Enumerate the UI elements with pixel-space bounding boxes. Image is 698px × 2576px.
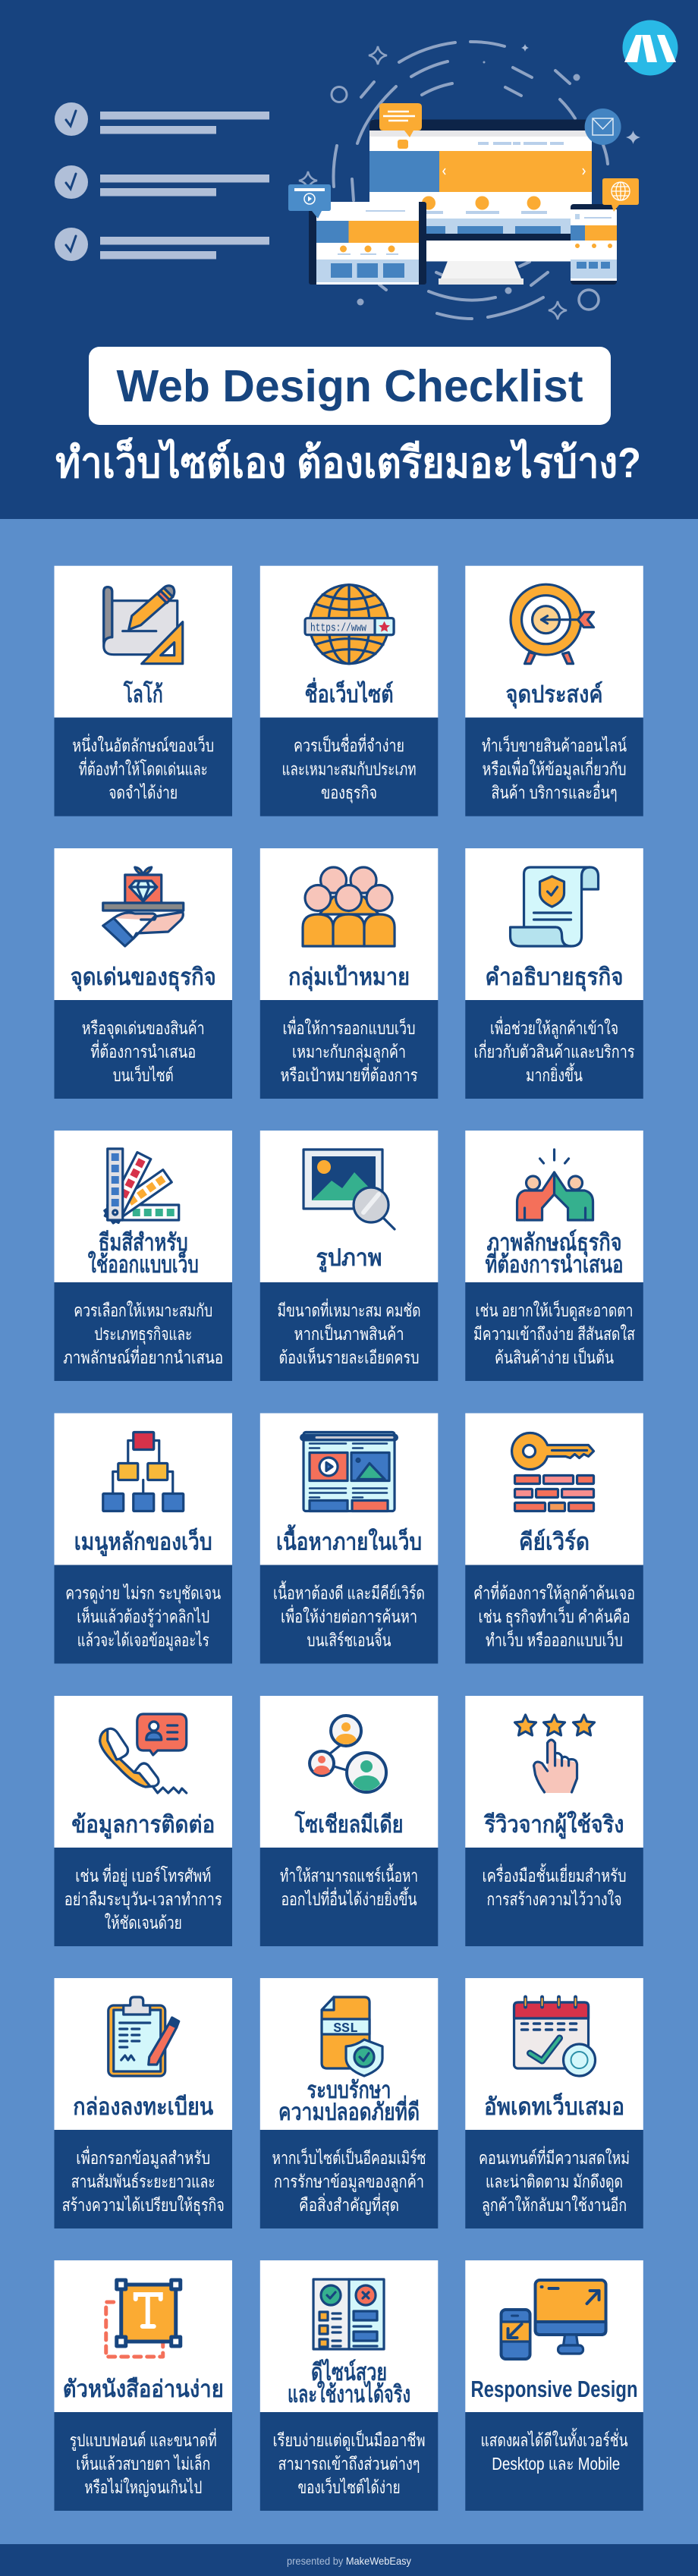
heading: ความปลอดภัยที่ดี [278, 2095, 420, 2125]
heading: และใช้งานได้จริง [288, 2380, 410, 2408]
description: ทำให้สามารถแชร์เนื้อหา [280, 1864, 418, 1886]
icon: picture and magnifier [303, 1150, 395, 1229]
description: หรือไม่ใหญ่จนเกินไป [84, 2477, 202, 2497]
icon: scroll with shield [511, 867, 599, 946]
heading: รูปภาพ [316, 1244, 382, 1272]
description: ลูกค้าให้กลับมาใช้งานอีก [482, 2195, 627, 2216]
description: ของธุรกิจ [321, 783, 377, 804]
description [272, 2147, 426, 2216]
description: เพื่อกรอกข้อมูลสำหรับ [76, 2146, 210, 2169]
description: เหมาะกับกลุ่มลูกค้า [292, 1042, 406, 1062]
heading: อัพเดทเว็บเสมอ [484, 2092, 624, 2120]
icon: key and bricks [512, 1433, 594, 1511]
description: และน่าติดตาม มักดึงดูด [486, 2172, 623, 2192]
description [62, 2146, 225, 2216]
heading: รีวิวจากผู้ใช้จริง [483, 1810, 624, 1839]
icon: ssl document and shield: SSL [333, 2021, 358, 2037]
card: reviews [465, 1696, 643, 1946]
icon: high five [517, 1150, 593, 1220]
description: หนึ่งในอัตลักษณ์ของเว็บ [72, 734, 214, 756]
description: การสร้างความไว้วางใจ [487, 1889, 622, 1909]
icon: monitor and phone [501, 2280, 606, 2359]
card: main menu [55, 1413, 232, 1663]
description: หรือจุดเด่นของสินค้า [82, 1018, 205, 1039]
description: เพื่อให้การออกแบบเว็บ [283, 1016, 416, 1038]
heading: Responsive Design [471, 2376, 638, 2402]
description: เพื่อให้ง่ายต่อการค้นหา [281, 1604, 417, 1627]
description [281, 1016, 418, 1085]
description: และเหมาะสมกับประเภท [282, 760, 417, 779]
footer: presented by MakeWebEasy [287, 2555, 411, 2567]
devices illustration [288, 42, 640, 319]
description [479, 2146, 630, 2216]
description: การรักษาข้อมูลของลูกค้า [274, 2172, 424, 2192]
heading: เนื้อหาภายในเว็บ [276, 1524, 422, 1555]
description: มีความเข้าถึงง่าย สีสันสดใส [473, 1324, 635, 1344]
heading [278, 2077, 420, 2125]
description: คือสิ่งสำคัญที่สุด [299, 2193, 399, 2216]
card: keywords [465, 1413, 643, 1663]
heading: คำอธิบายธุรกิจ [486, 964, 624, 992]
description: ควรดูง่าย ไม่รก ระบุชัดเจน [65, 1583, 221, 1604]
card: update site [465, 1978, 643, 2228]
description: หรือเพื่อให้ข้อมูลเกี่ยวกับ [483, 757, 627, 780]
icon: group of people [303, 867, 395, 946]
description: บนเสิร์ชเอนจิ้น [307, 1628, 391, 1650]
description: เครื่องมือชั้นเยี่ยมสำหรับ [483, 1864, 627, 1886]
heading: ดีไซน์สวย [311, 2358, 387, 2386]
icon: globe url [305, 585, 394, 664]
card: purpose [465, 566, 643, 816]
description: รูปแบบฟอนต์ และขนาดที่ [70, 2428, 217, 2451]
title box [89, 347, 611, 425]
description: สานสัมพันธ์ระยะยาวและ [71, 2172, 215, 2191]
description: ค้นสินค้าง่าย เป็นต้น [495, 1346, 614, 1367]
heading: จุดเด่นของธุรกิจ [71, 964, 216, 992]
icon: sitemap [103, 1433, 184, 1511]
heading: ระบบรักษา [307, 2077, 391, 2103]
icon: social network [310, 1716, 386, 1792]
card: security [260, 1978, 438, 2228]
heading: จุดประสงค์ [506, 681, 603, 709]
description: เช่น ธุรกิจทำเว็บ คำค้นคือ [479, 1606, 630, 1627]
body background [0, 519, 698, 2544]
description: ประเภทธุรกิจและ [94, 1324, 192, 1345]
icon: do and don't layouts [313, 2279, 384, 2349]
heading: เมนูหลักของเว็บ [74, 1527, 212, 1557]
description [72, 734, 214, 803]
description: แสดงผลได้ดีในทั้งเวอร์ชั่น [481, 2428, 628, 2450]
description: คอนเทนต์ที่มีความสดใหม่ [479, 2146, 630, 2168]
brand logo [622, 20, 678, 76]
description: เพื่อช่วยให้ลูกค้าเข้าใจ [490, 1016, 618, 1039]
heading [288, 2358, 410, 2408]
description: สร้างความได้เปรียบให้ธุรกิจ [62, 2195, 225, 2216]
description: หรือเป้าหมายที่ต้องการ [281, 1063, 418, 1085]
card: logo [55, 566, 232, 816]
heading: ที่ต้องการนำเสนอ [486, 1247, 624, 1278]
checklist illustration [55, 102, 269, 261]
description: ของเว็บไซต์ได้ง่าย [298, 2476, 401, 2497]
icon: ssl document and shield [322, 1997, 382, 2076]
subtitle: ทำเว็บไซต์เอง ต้องเตรียมอะไรบ้าง? [55, 436, 641, 486]
description: มากยิ่งขึ้น [526, 1063, 583, 1085]
description: เห็นแล้วสบายตา ไม่เล็ก [76, 2452, 210, 2474]
description [64, 1864, 222, 1933]
description: ทำเว็บ หรือออกแบบเว็บ [486, 1628, 623, 1650]
description: คำที่ต้องการให้ลูกค้าค้นเจอ [473, 1581, 635, 1604]
heading: โซเชียลมีเดีย [294, 1810, 404, 1838]
heading: ธีมสีสำหรับ [99, 1229, 188, 1256]
icon: web page [303, 1433, 395, 1511]
icon: globe url: https://www [310, 622, 366, 635]
icon: text box [106, 2280, 181, 2357]
description [473, 1299, 635, 1367]
heading: คีย์เวิร์ด [519, 1528, 590, 1555]
description [65, 1583, 221, 1651]
description: ออกไปที่อื่นได้ง่ายยิ่งขึ้น [281, 1887, 417, 1909]
card: color theme [55, 1131, 232, 1381]
heading: ใช้ออกแบบเว็บ [88, 1250, 199, 1278]
card: social media [260, 1696, 438, 1946]
description [82, 1018, 205, 1085]
description [483, 1864, 627, 1909]
description: สามารถเข้าถึงส่วนต่างๆ [278, 2454, 420, 2474]
icon: gem on hand [103, 867, 184, 946]
description [273, 2429, 426, 2497]
description: ให้ชัดเจนด้วย [105, 1913, 182, 1933]
description: สินค้า บริการและอื่นๆ [492, 781, 618, 803]
card: usable design [260, 2260, 438, 2511]
heading: โลโก้ [123, 681, 163, 708]
description [70, 2428, 217, 2497]
heading [88, 1229, 199, 1278]
header background [0, 0, 698, 519]
card: business highlight [55, 848, 232, 1099]
icon: clipboard [108, 1997, 179, 2076]
heading: ภาพลักษณ์ธุรกิจ [487, 1229, 622, 1257]
description: อย่าลืมระบุวัน-เวลาทำการ [64, 1889, 222, 1910]
description: ที่ต้องทำให้โดดเด่นและ [79, 757, 208, 779]
title box: Web Design Checklist [117, 361, 583, 411]
description [474, 1016, 635, 1085]
heading: ตัวหนังสืออ่านง่าย [63, 2376, 224, 2402]
description: Desktop และ Mobile [492, 2454, 620, 2474]
card: contact [55, 1696, 232, 1946]
description: เนื้อหาต้องดี และมีคีย์เวิร์ด [273, 1581, 425, 1603]
description: ควรเป็นชื่อที่จำง่าย [294, 734, 404, 756]
description [63, 1301, 223, 1367]
icon: stars and pointing hand [515, 1715, 595, 1793]
description [481, 2428, 628, 2474]
card: brand image [465, 1131, 643, 1381]
description [473, 1581, 635, 1650]
heading: ข้อมูลการติดต่อ [71, 1811, 215, 1839]
description: ต้องเห็นรายละเอียดครบ [279, 1346, 420, 1367]
footer [0, 2544, 698, 2576]
description: จดจำได้ง่าย [108, 783, 178, 803]
description: เรียบง่ายแต่ดูเป็นมืออาชีพ [273, 2429, 426, 2451]
card: responsive design [465, 2260, 643, 2511]
description: มีขนาดที่เหมาะสม คมชัด [278, 1298, 421, 1320]
icon: target [511, 584, 594, 664]
icon: phone and contact card [100, 1714, 187, 1793]
card: sign-up box [55, 1978, 232, 2228]
description: หากเว็บไซต์เป็นอีคอมเมิร์ซ [272, 2147, 426, 2168]
heading: กล่องลงทะเบียน [73, 2093, 213, 2120]
description [482, 734, 627, 803]
card: website name [260, 566, 438, 816]
description [273, 1581, 425, 1650]
card: business description [465, 848, 643, 1099]
description: แล้วจะได้เจอข้อมูลอะไร [77, 1630, 209, 1651]
card: readable typography [55, 2260, 232, 2511]
description: เห็นแล้วต้องรู้ว่าคลิกไป [77, 1606, 209, 1627]
description: ภาพลักษณ์ที่อยากนำเสนอ [63, 1345, 223, 1367]
description: เช่น ที่อยู่ เบอร์โทรศัพท์ [75, 1864, 211, 1886]
card: images [260, 1131, 438, 1381]
icon: color fan [105, 1149, 179, 1223]
card: site content [260, 1413, 438, 1663]
description: ควรเลือกให้เหมาะสมกับ [74, 1301, 212, 1320]
description: หากเป็นภาพสินค้า [294, 1323, 404, 1344]
icon: logo drafting [104, 586, 183, 664]
heading [486, 1229, 624, 1278]
description: ทำเว็บขายสินค้าออนไลน์ [482, 734, 627, 756]
card: target audience [260, 848, 438, 1099]
description: ที่ต้องการนำเสนอ [90, 1040, 196, 1062]
heading: กลุ่มเป้าหมาย [288, 964, 410, 992]
description [280, 1864, 418, 1909]
description [282, 734, 417, 804]
description: บนเว็บไซต์ [113, 1064, 174, 1085]
description: เช่น อยากให้เว็บดูสะอาดตา [476, 1299, 634, 1321]
description: เกี่ยวกับตัวสินค้าและบริการ [474, 1040, 635, 1062]
description [278, 1298, 421, 1367]
icon: calendar [514, 1997, 596, 2076]
heading: ชื่อเว็บไซต์ [305, 678, 394, 708]
